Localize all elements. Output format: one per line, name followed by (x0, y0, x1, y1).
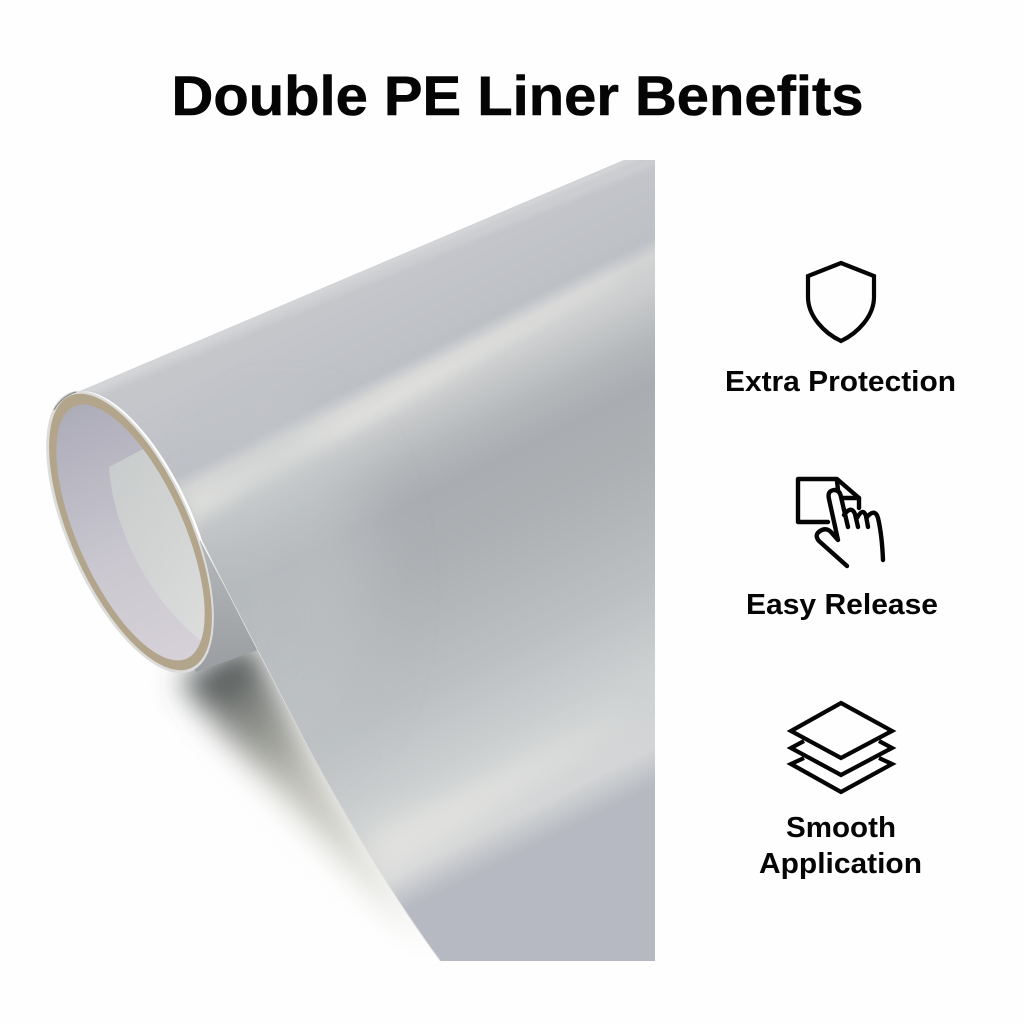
icon: stacked layers (791, 703, 892, 792)
benefit: smooth application: Application (759, 848, 922, 880)
benefit: smooth application (759, 703, 922, 880)
label: extra protection: Extra Protection (725, 366, 956, 398)
product image: grey vinyl roll with double PE liner (12, 150, 660, 970)
dark rim detail (54, 392, 76, 410)
inner curled sheet (109, 449, 205, 640)
title: Double PE Liner Benefits (172, 64, 864, 127)
underside of roll (185, 540, 258, 672)
sheet left edge light line (203, 543, 440, 961)
benefit: extra protection (725, 263, 956, 398)
upper highlight band (189, 317, 545, 520)
lower highlight (368, 752, 562, 874)
icon: shield (808, 263, 874, 341)
label: smooth application: Smooth (786, 812, 896, 844)
roll core end (46, 390, 214, 673)
top edge gloss (80, 156, 640, 393)
cast shadow under sheet (180, 640, 432, 950)
left side lightening below the band (212, 442, 364, 700)
benefit: easy release (746, 479, 938, 621)
label: easy release: Easy Release (746, 589, 938, 621)
icon: hand peeling a liner corner (798, 479, 883, 566)
main sheet surface (40, 150, 660, 970)
